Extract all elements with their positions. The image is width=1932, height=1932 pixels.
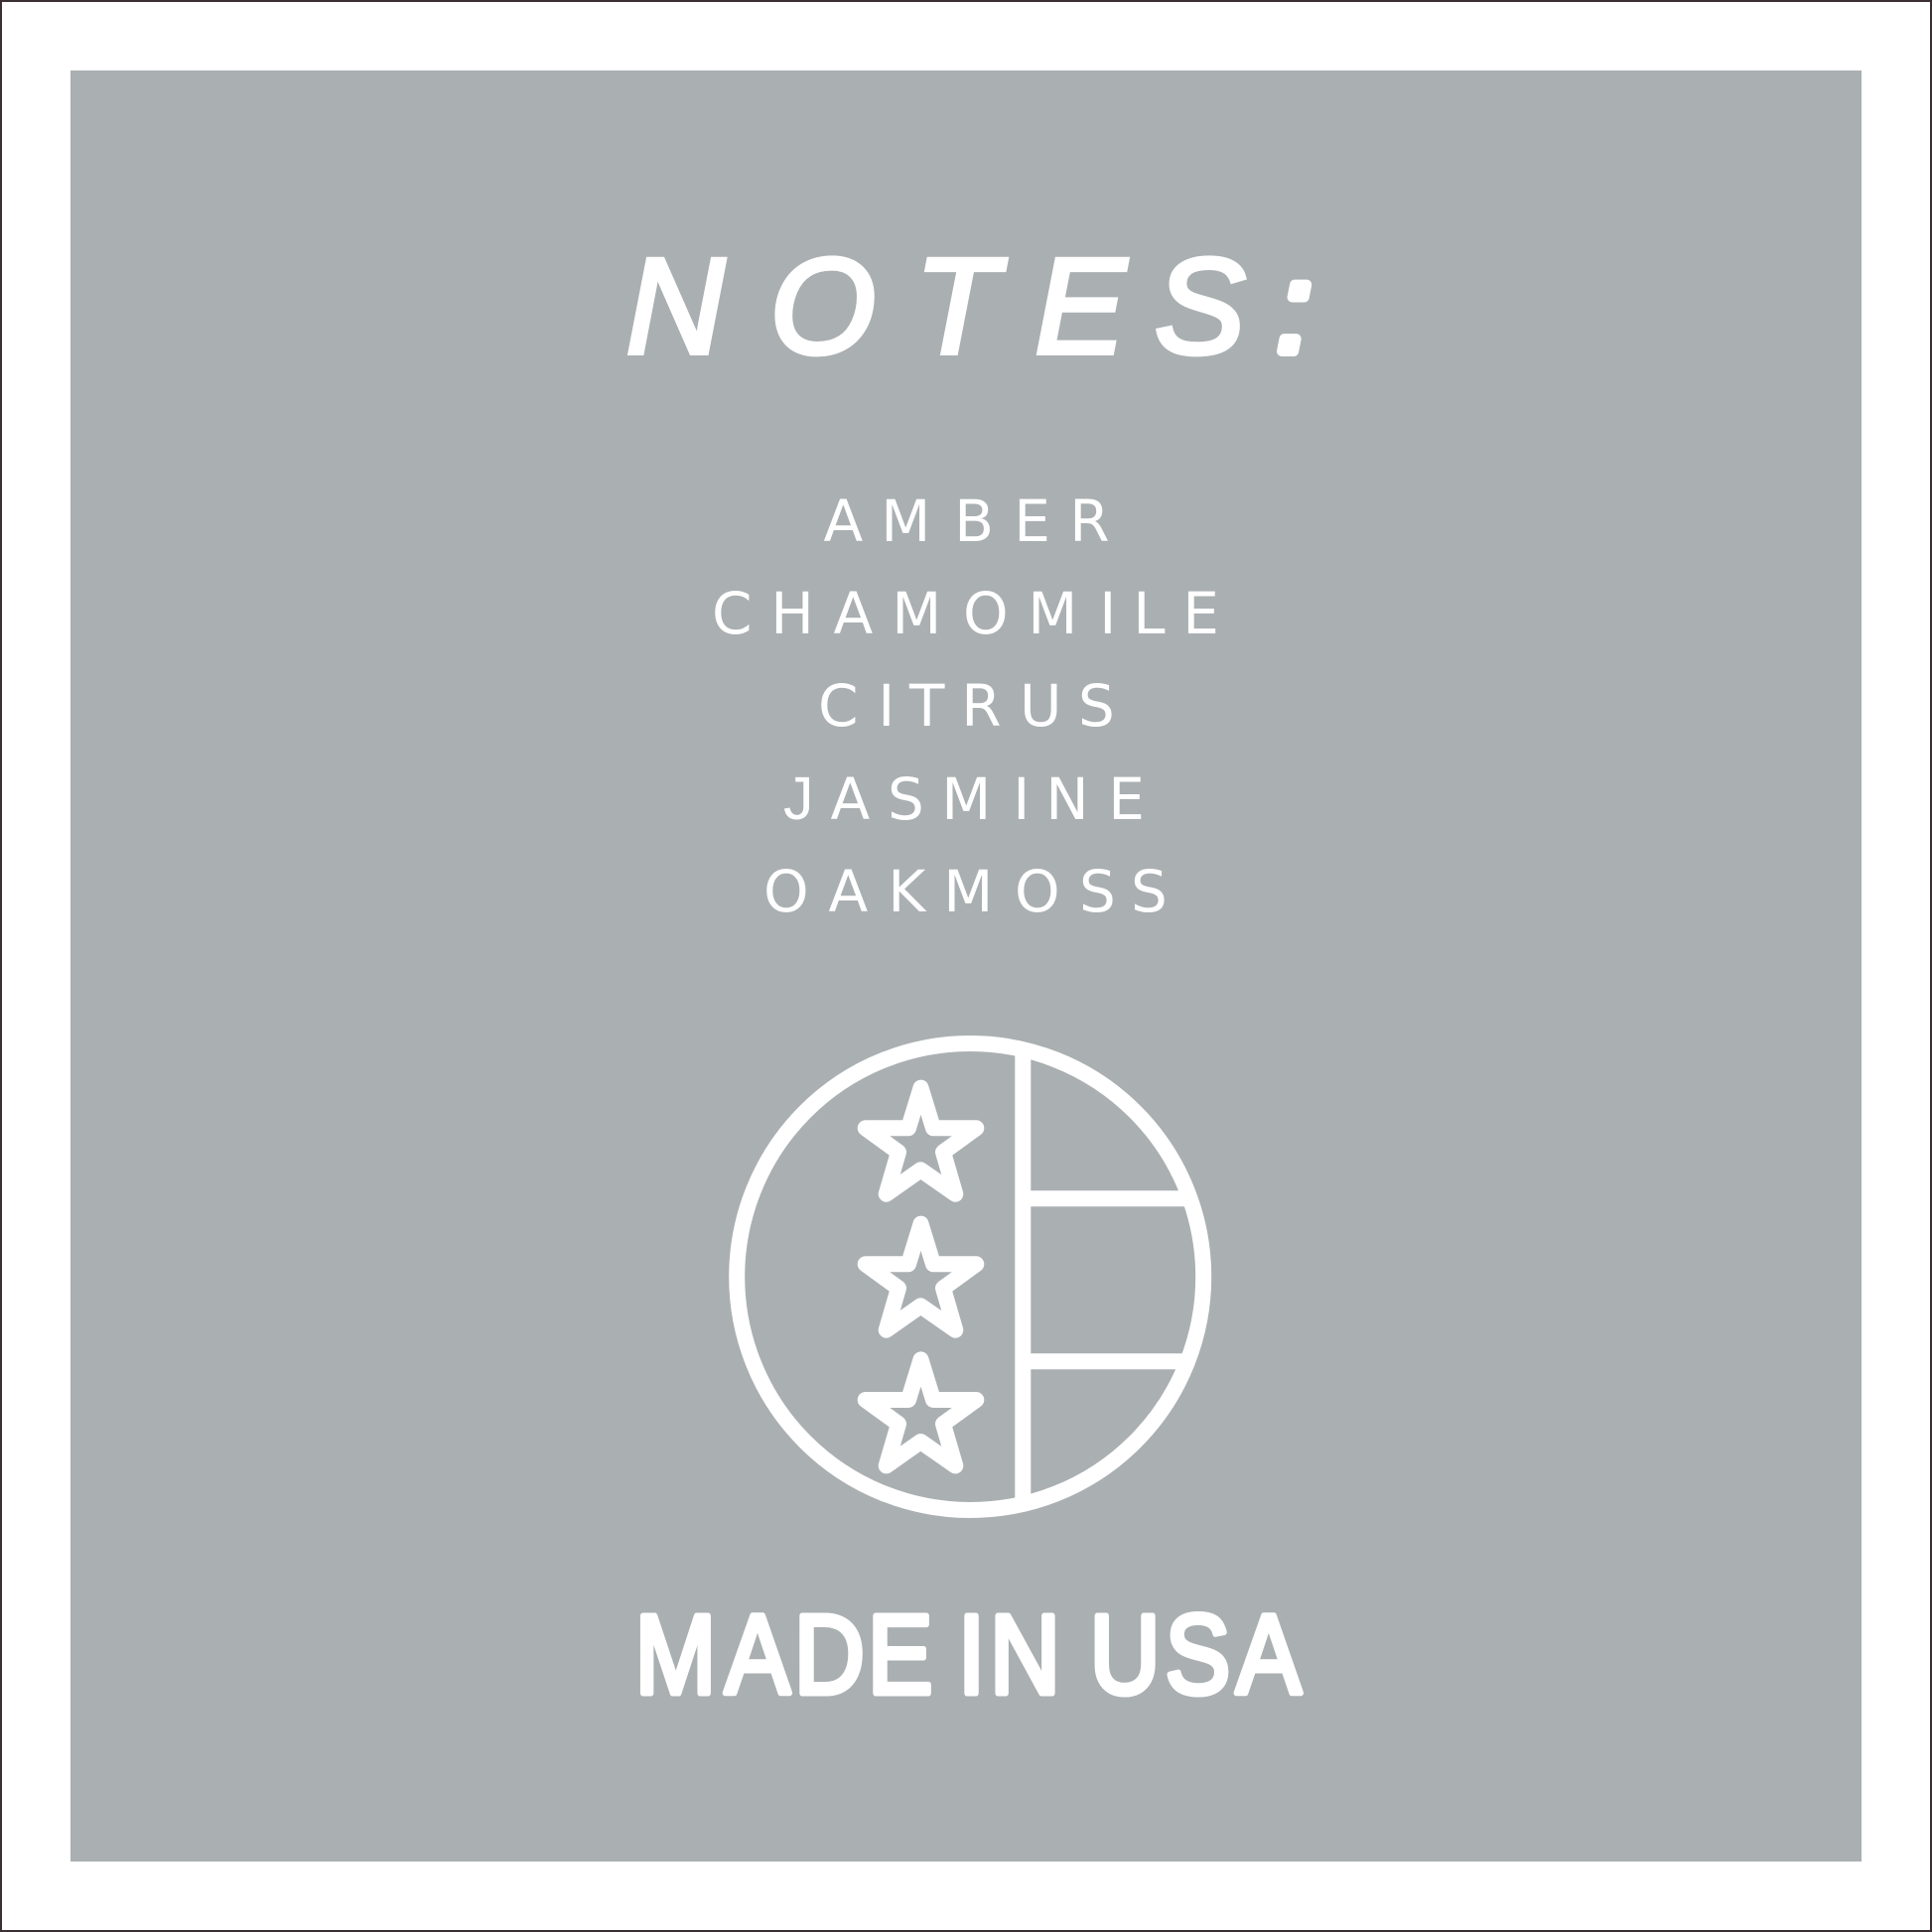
note: jasmine: ASMINE xyxy=(830,765,1145,833)
note: chamomile: CHAMOMILE xyxy=(712,580,1219,647)
made in usa label: MADE IN USA xyxy=(634,1592,1302,1718)
note: citrus: CITRUS xyxy=(818,672,1115,740)
note: oakmoss: OAKMOSS xyxy=(763,858,1168,925)
list of fragrance notes xyxy=(712,487,1219,925)
icon: lower stripe xyxy=(1023,1353,1187,1369)
icon: star top xyxy=(866,1088,976,1194)
icon outline: circle xyxy=(737,1043,1203,1510)
title: NOTES xyxy=(626,230,1245,383)
icon: vertical divider xyxy=(1015,1049,1031,1504)
icon: upper stripe xyxy=(1023,1190,1189,1206)
icon: circle with three stars and stripes xyxy=(737,1043,1203,1510)
title: : xyxy=(1277,237,1311,378)
note: amber: AMBER xyxy=(824,487,1110,555)
icon: star middle xyxy=(866,1224,976,1330)
icon: star bottom xyxy=(866,1359,976,1465)
note: jasmine: J xyxy=(783,764,814,832)
